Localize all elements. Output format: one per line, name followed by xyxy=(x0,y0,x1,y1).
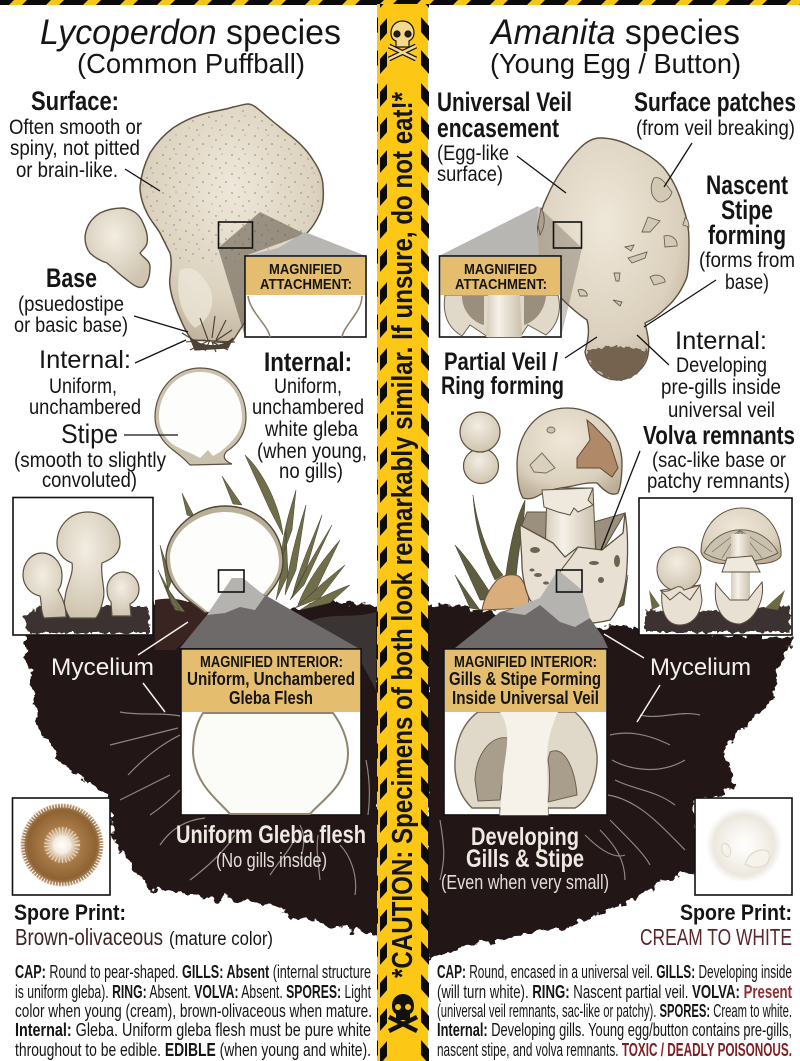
label: surface: spiny, not pitted xyxy=(10,137,140,160)
label: base: (psuedostipe xyxy=(18,293,124,316)
label: base: Base xyxy=(46,263,97,293)
panel: magnified interior left xyxy=(181,649,361,815)
illustration: mature amanita in volva xyxy=(517,408,628,624)
label: stipe: (smooth to slightly xyxy=(14,449,166,472)
panel: magnified interior left: Uniform, Unchambered xyxy=(187,669,355,689)
soil: left xyxy=(25,599,380,938)
illustration: puffball cross section xyxy=(155,368,246,465)
label: internal right of cross section: Internal: xyxy=(264,347,352,377)
label: surface: Often smooth or xyxy=(9,116,142,139)
label: spore print left: Spore Print: xyxy=(14,900,126,925)
grass: left xyxy=(158,455,350,612)
icon: bottom skull xyxy=(389,994,417,1031)
title: Amanita: (Young Egg / Button) xyxy=(490,48,741,79)
panel: magnified interior right: MAGNIFIED INTERIOR: xyxy=(454,654,597,671)
magnifier beam: right interior xyxy=(455,570,608,648)
text block: Amanita facts xyxy=(437,962,792,1060)
label: universal veil xyxy=(437,87,572,186)
label: nascent stipe: base) xyxy=(725,271,769,294)
label: surface: or brain-like. xyxy=(16,159,118,182)
panel: magnified interior right xyxy=(444,649,607,815)
label: universal veil: (Egg-like xyxy=(437,142,509,165)
zoom marker: left interior xyxy=(218,570,244,592)
text block: Lycoperdon facts: color when young (cream), brown-olivaceous when mature. xyxy=(15,1001,372,1021)
text block: Amanita facts: (will turn white). RING: Nascent partial veil. VOLVA: Present xyxy=(437,982,792,1002)
label: spore print left: Brown-olivaceous xyxy=(15,924,163,950)
label: developing gills: (Even when very small) xyxy=(441,872,609,894)
label: spore print left: (mature color) xyxy=(169,929,273,950)
panel: magnified interior left: Gleba Flesh xyxy=(229,688,313,708)
label: internal right: pre-gills inside xyxy=(661,376,781,399)
label: developing gills: Developing xyxy=(471,823,579,851)
label: universal veil: encasement xyxy=(437,113,559,143)
illustration: small puffball xyxy=(85,208,150,287)
label: internal right xyxy=(661,327,781,422)
label: volva remnants xyxy=(643,420,795,493)
label: base: or basic base) xyxy=(14,314,128,337)
label: internal right of cross section: white gleba xyxy=(264,418,358,441)
label: developing gills xyxy=(441,823,609,894)
text block: Lycoperdon facts xyxy=(15,962,372,1060)
panel: magnified interior right: Inside Universal Veil xyxy=(452,688,599,708)
label: nascent stipe xyxy=(699,170,795,294)
zoom marker: right attachment xyxy=(554,222,582,248)
label: mycelium right: Mycelium xyxy=(650,654,751,681)
panel: magnified attachment right: MAGNIFIED xyxy=(464,261,537,278)
label: internal right of cross section: unchambered xyxy=(252,396,364,419)
title: Lycoperdon xyxy=(40,12,341,79)
label: developing gills: Gills & Stipe xyxy=(466,845,584,873)
inset: amanita pair xyxy=(639,498,792,635)
label: universal veil: Universal Veil xyxy=(437,87,572,117)
puffball base roots xyxy=(182,316,235,352)
top hazard stripe xyxy=(0,0,800,5)
label: partial veil: Partial Veil / xyxy=(444,348,558,376)
label: internal right of cross section: no gills) xyxy=(279,460,343,483)
panel: magnified interior left: MAGNIFIED INTERIOR: xyxy=(200,654,343,671)
label: stipe: Stipe xyxy=(61,419,118,449)
label: surface: Surface: xyxy=(31,86,119,116)
label: surface patches xyxy=(634,87,796,140)
leader lines xyxy=(124,143,716,550)
text block: Lycoperdon facts: Internal: Gleba. Uniform gleba flesh must be pure white xyxy=(15,1020,371,1040)
illustration: egg button xyxy=(537,138,689,380)
label: stipe xyxy=(14,419,166,492)
surface patches xyxy=(538,178,689,306)
label: partial veil: Ring forming xyxy=(441,372,564,400)
label: partial veil xyxy=(441,348,564,400)
label: internal left: Internal: xyxy=(39,346,131,374)
panel: spore print cream xyxy=(695,798,792,895)
zoom marker: left attachment xyxy=(218,222,252,248)
illustration: large puffball xyxy=(140,104,323,352)
label: stipe: convoluted) xyxy=(42,469,137,492)
grass: right xyxy=(455,495,628,612)
label: nascent stipe: Stipe xyxy=(721,195,773,225)
white leader lines xyxy=(138,622,660,722)
label: spore print right xyxy=(640,900,792,950)
zoom marker: right interior xyxy=(556,570,582,592)
panel: magnified attachment left: ATTACHMENT: xyxy=(260,276,352,293)
label: internal left: unchambered xyxy=(29,396,141,419)
panel: magnified interior right: Gills & Stipe Forming xyxy=(449,669,601,689)
panel: magnified attachment right: ATTACHMENT: xyxy=(455,276,547,293)
label: internal right of cross section: (when young, xyxy=(257,440,367,463)
label: base xyxy=(14,263,128,337)
soil: right xyxy=(426,602,792,958)
label: internal right of cross section: Uniform, xyxy=(274,375,342,398)
label: internal right: Internal: xyxy=(675,327,767,355)
illustration: two small balls xyxy=(460,412,500,484)
panel: magnified attachment left: MAGNIFIED xyxy=(269,261,342,278)
caution strip xyxy=(377,4,429,1061)
label: universal veil: surface) xyxy=(437,163,503,186)
title: Lycoperdon: Lycoperdon species xyxy=(40,12,341,52)
title: Lycoperdon: (Common Puffball) xyxy=(77,48,305,79)
magnifier beam: left attachment xyxy=(218,212,366,337)
text block: Lycoperdon facts: is uniform gleba). RING: Absent. VOLVA: Absent. SPORES: Light xyxy=(15,982,371,1002)
icon: top skull xyxy=(389,21,416,59)
illustration: rock xyxy=(482,575,529,610)
illustration: lower puffball section xyxy=(166,506,283,613)
label: mycelium left: Mycelium xyxy=(51,654,154,681)
label: internal right: Developing xyxy=(676,354,767,377)
text block: Lycoperdon facts: CAP: Round to pear-shaped. GILLS: Absent (internal structure xyxy=(15,962,371,982)
label: uniform gleba flesh xyxy=(176,821,366,872)
panel: magnified attachment left xyxy=(245,256,366,337)
panel: magnified attachment right xyxy=(440,256,561,337)
label: internal left: Uniform, xyxy=(49,375,117,398)
title: Amanita xyxy=(489,12,741,79)
panel: spore print brown xyxy=(12,798,110,895)
label: surface xyxy=(9,86,142,182)
label: spore print left xyxy=(14,900,273,950)
label: internal right: universal veil xyxy=(668,399,775,422)
magnifier beam: right attachment xyxy=(439,206,582,337)
text block: Lycoperdon facts: throughout to be edible. EDIBLE (when young and white). xyxy=(15,1040,371,1060)
title: Amanita: Amanita species xyxy=(489,12,740,52)
label: uniform gleba flesh: (No gills inside) xyxy=(216,850,327,872)
label: internal right of cross section xyxy=(252,347,367,483)
inset: puffball trio xyxy=(13,498,153,635)
label: internal left xyxy=(29,346,141,419)
label: uniform gleba flesh: Uniform Gleba flesh xyxy=(176,821,366,849)
magnifier beam: left interior xyxy=(180,578,358,648)
